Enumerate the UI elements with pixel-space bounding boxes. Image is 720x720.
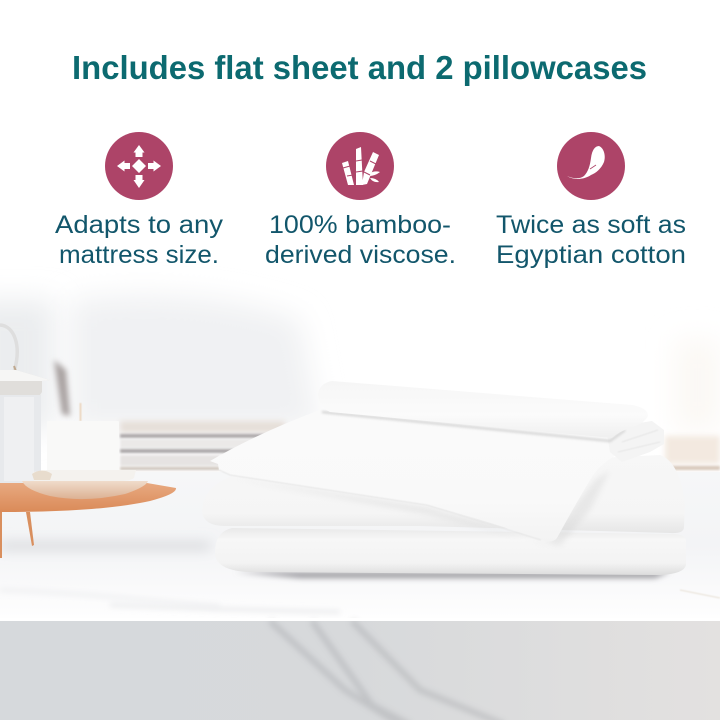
shadow under stack [235,572,670,578]
pillowcase shadow [322,412,625,441]
feature: adapts to any mattress size [55,132,224,269]
label line 2: Egyptian cotton [496,241,686,269]
label line 1: 100% bamboo- [269,211,451,239]
folded sheet stack [202,381,686,578]
icon: feather [557,132,625,200]
pillowcase hem [606,421,664,462]
bottom folded sheet [215,528,686,575]
middle folded sheet [202,455,685,533]
wooden tray with plate and legs [0,481,176,558]
feature: bamboo viscose [265,132,456,269]
candle on saucer [32,403,136,481]
icon: bamboo [326,132,394,200]
blurred bed stripes behind the table [120,421,720,470]
icon: four-way arrows [105,132,173,200]
marble table front edge [0,618,720,720]
label line 2: mattress size. [59,241,219,269]
flat sheet fold [210,410,626,542]
title: Includes flat sheet and 2 pillowcases [72,49,647,86]
label line 1: Adapts to any [55,211,224,239]
pillowcase [318,381,648,438]
lantern [0,325,50,483]
label line 1: Twice as soft as [496,211,686,239]
shadow of the flat sheet [232,470,610,546]
label line 2: derived viscose. [265,241,456,269]
background: blurred bedroom wall and pillows [0,0,720,480]
marble table top [0,472,720,619]
feature: twice as soft [496,132,686,269]
